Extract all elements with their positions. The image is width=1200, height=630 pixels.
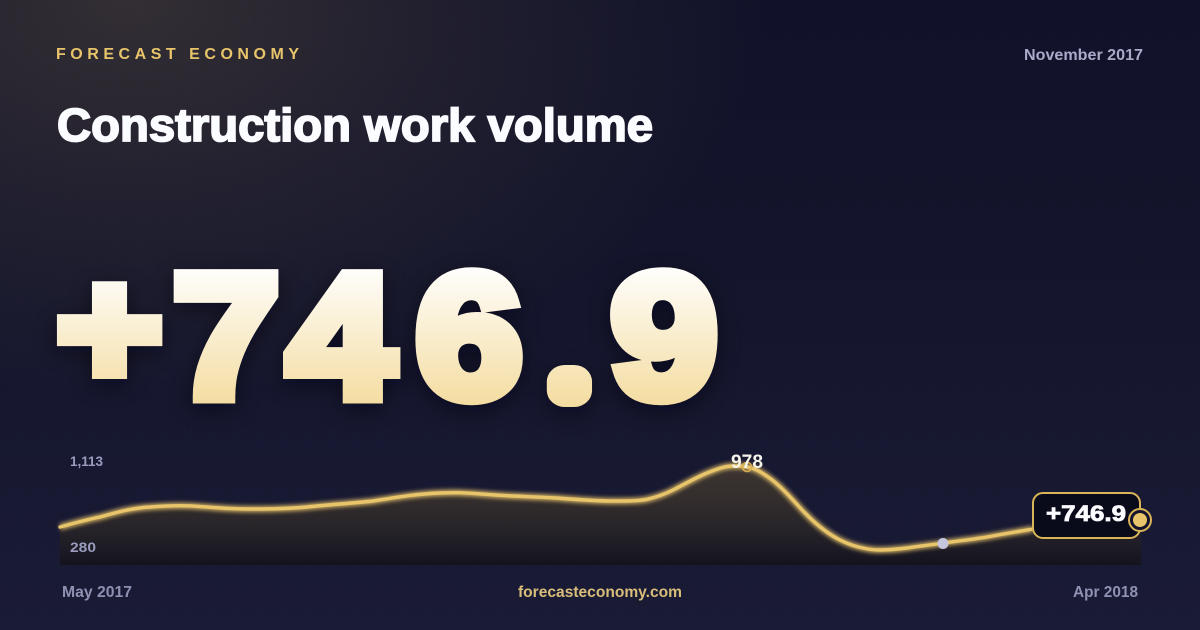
- kicker: Forecast Economy: FORECAST ECONOMY: [56, 46, 299, 63]
- big number: +746.9: +: [57, 242, 162, 426]
- peak label: 978: 978: [731, 452, 763, 473]
- big number: +746.9: 7: [173, 238, 279, 434]
- callout: +746.9: [1033, 493, 1140, 538]
- max label: 1,113: 1,113: [70, 453, 103, 469]
- big number: +746.9: +: [57, 236, 162, 420]
- start date: May 2017: May 2017: [62, 584, 132, 601]
- source: forecasteconomy.com: forecasteconomy.com: [518, 584, 682, 601]
- line: [60, 466, 1033, 550]
- callout: +746.9: +746.9: [1046, 501, 1126, 526]
- big number: +746.9: 6: [416, 244, 522, 440]
- big number: +746.9: 7: [173, 244, 279, 440]
- current point dot: [938, 538, 948, 549]
- area under line: [60, 466, 1141, 565]
- big number: +746.9: 9: [611, 244, 717, 440]
- big number: +746.9: [57, 236, 717, 440]
- big number: +746.9: 4: [288, 238, 394, 434]
- big number: +746.9: 9: [611, 238, 717, 434]
- date: November 2017: November 2017: [1024, 47, 1143, 64]
- peak marker: [742, 462, 752, 472]
- end marker: [1129, 509, 1151, 531]
- sparkline chart: [60, 452, 1151, 565]
- big number: +746.9: .: [560, 337, 579, 404]
- line glow: [60, 466, 1033, 550]
- end date: Apr 2018: Apr 2018: [1073, 584, 1138, 601]
- title: Construction work volume: [57, 99, 653, 151]
- big number: +746.9: 6: [416, 238, 522, 434]
- big number: +746.9: 4: [288, 244, 394, 440]
- big number: +746.9: .: [560, 343, 579, 410]
- min label: 280: 280: [70, 539, 96, 555]
